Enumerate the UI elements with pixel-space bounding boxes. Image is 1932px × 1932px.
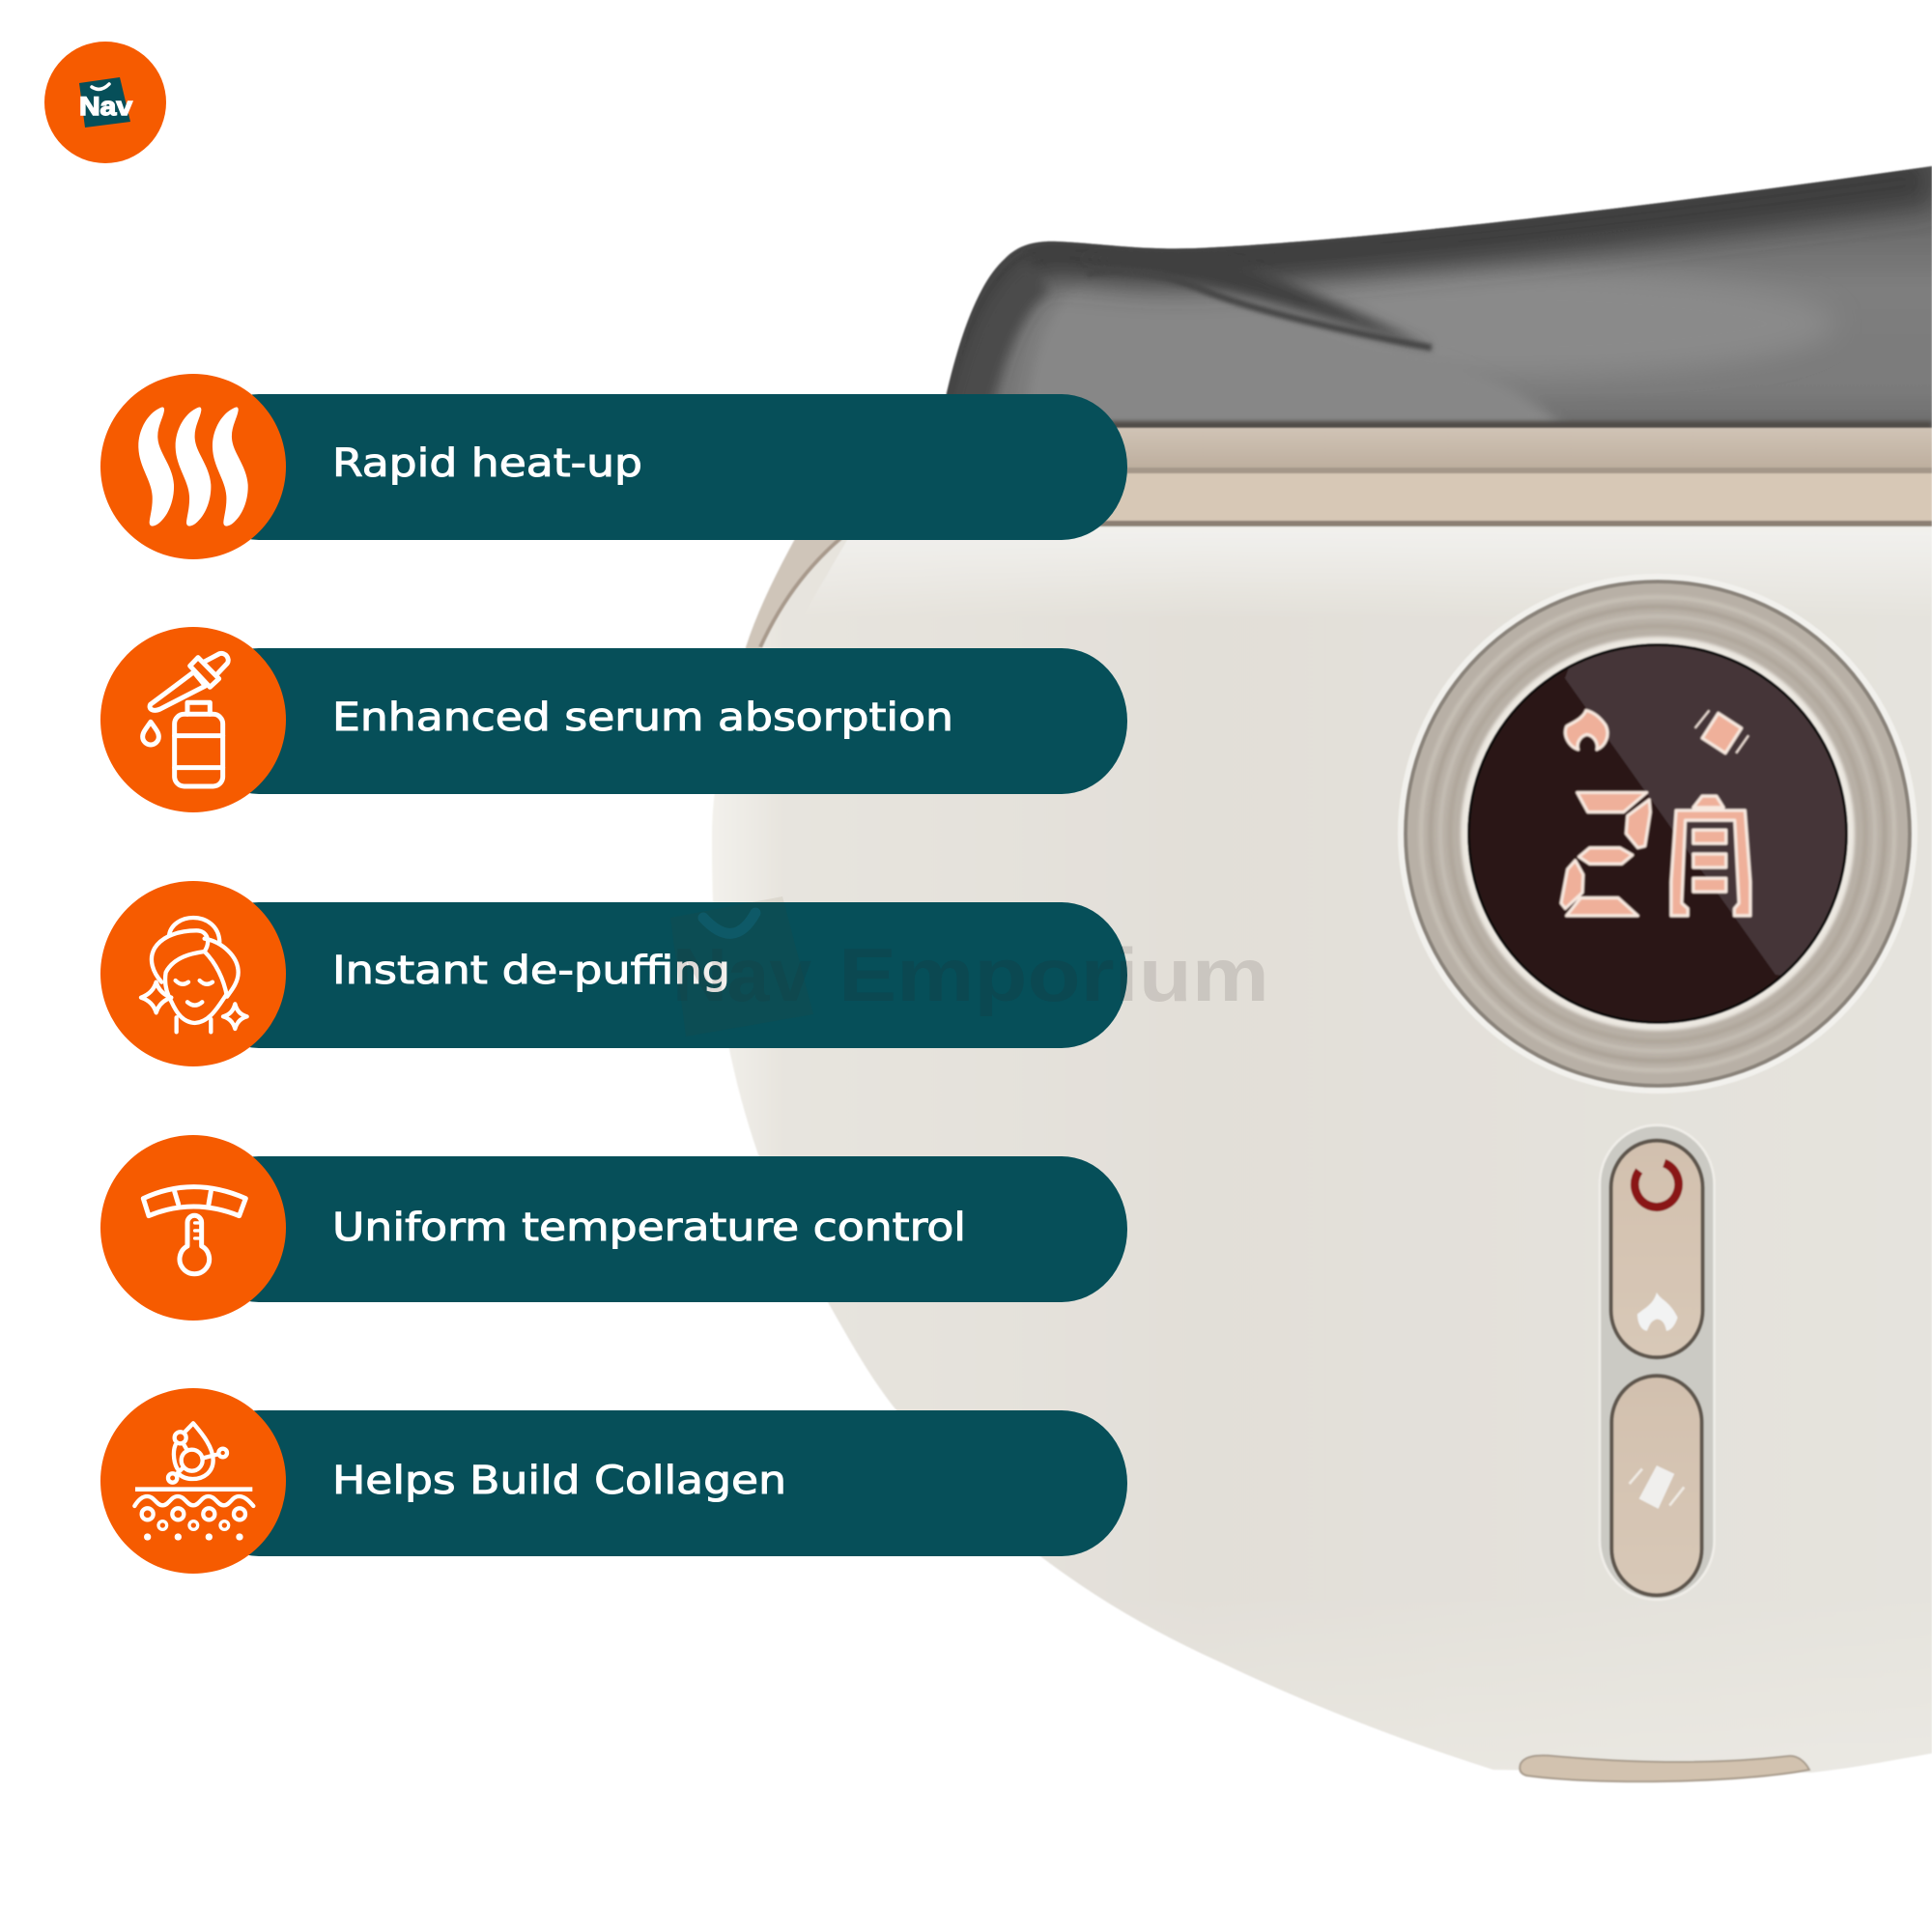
benefit 5: build collagen bbox=[100, 1388, 1127, 1574]
digit segments bbox=[1561, 792, 1650, 916]
panel: product device bbox=[712, 166, 1932, 1781]
display ring and screen bbox=[1398, 574, 1918, 1094]
control buttons bbox=[1600, 1125, 1715, 1600]
watermark: Nav Emporium: Nav bbox=[672, 932, 812, 1017]
device tan corner trim bbox=[720, 526, 869, 782]
label: Helps Build Collagen bbox=[332, 1459, 786, 1503]
icon: face with towel bbox=[141, 918, 247, 1032]
device cream body bbox=[712, 526, 1932, 1773]
label: Uniform temperature control bbox=[332, 1206, 966, 1250]
watermark: Nav Emporium bbox=[670, 896, 1269, 1037]
flame indicator bbox=[1565, 710, 1607, 750]
benefit 4: temperature control bbox=[100, 1135, 1127, 1321]
brand logo badge bbox=[44, 42, 166, 163]
benefit 1: rapid heat-up bbox=[100, 374, 1127, 559]
mode indicator bbox=[1695, 710, 1748, 753]
label: Enhanced serum absorption bbox=[332, 696, 953, 740]
mode button bbox=[1611, 1376, 1702, 1595]
device bottom tan button bbox=[1520, 1755, 1809, 1781]
watermark: Nav Emporium: Emporium bbox=[838, 932, 1269, 1017]
label: Rapid heat-up bbox=[332, 441, 642, 486]
device tan band bbox=[850, 428, 1932, 532]
screen readout bbox=[1561, 710, 1750, 916]
icon: dropper and bottle bbox=[143, 653, 228, 786]
device dark top ridge bbox=[927, 166, 1932, 430]
benefit 3: de-puffing bbox=[100, 881, 1127, 1066]
battery segments bbox=[1671, 796, 1750, 916]
icon: thermometer gauge bbox=[143, 1187, 245, 1274]
icon: heat waves bbox=[138, 408, 248, 526]
icon: skin layers and molecule bbox=[134, 1423, 253, 1541]
benefit 2: serum absorption bbox=[100, 627, 1127, 812]
screen background bbox=[1468, 645, 1847, 1022]
brand logo badge: Nav bbox=[79, 92, 132, 121]
label: Instant de-puffing bbox=[332, 949, 730, 993]
power and heat button bbox=[1611, 1141, 1703, 1357]
